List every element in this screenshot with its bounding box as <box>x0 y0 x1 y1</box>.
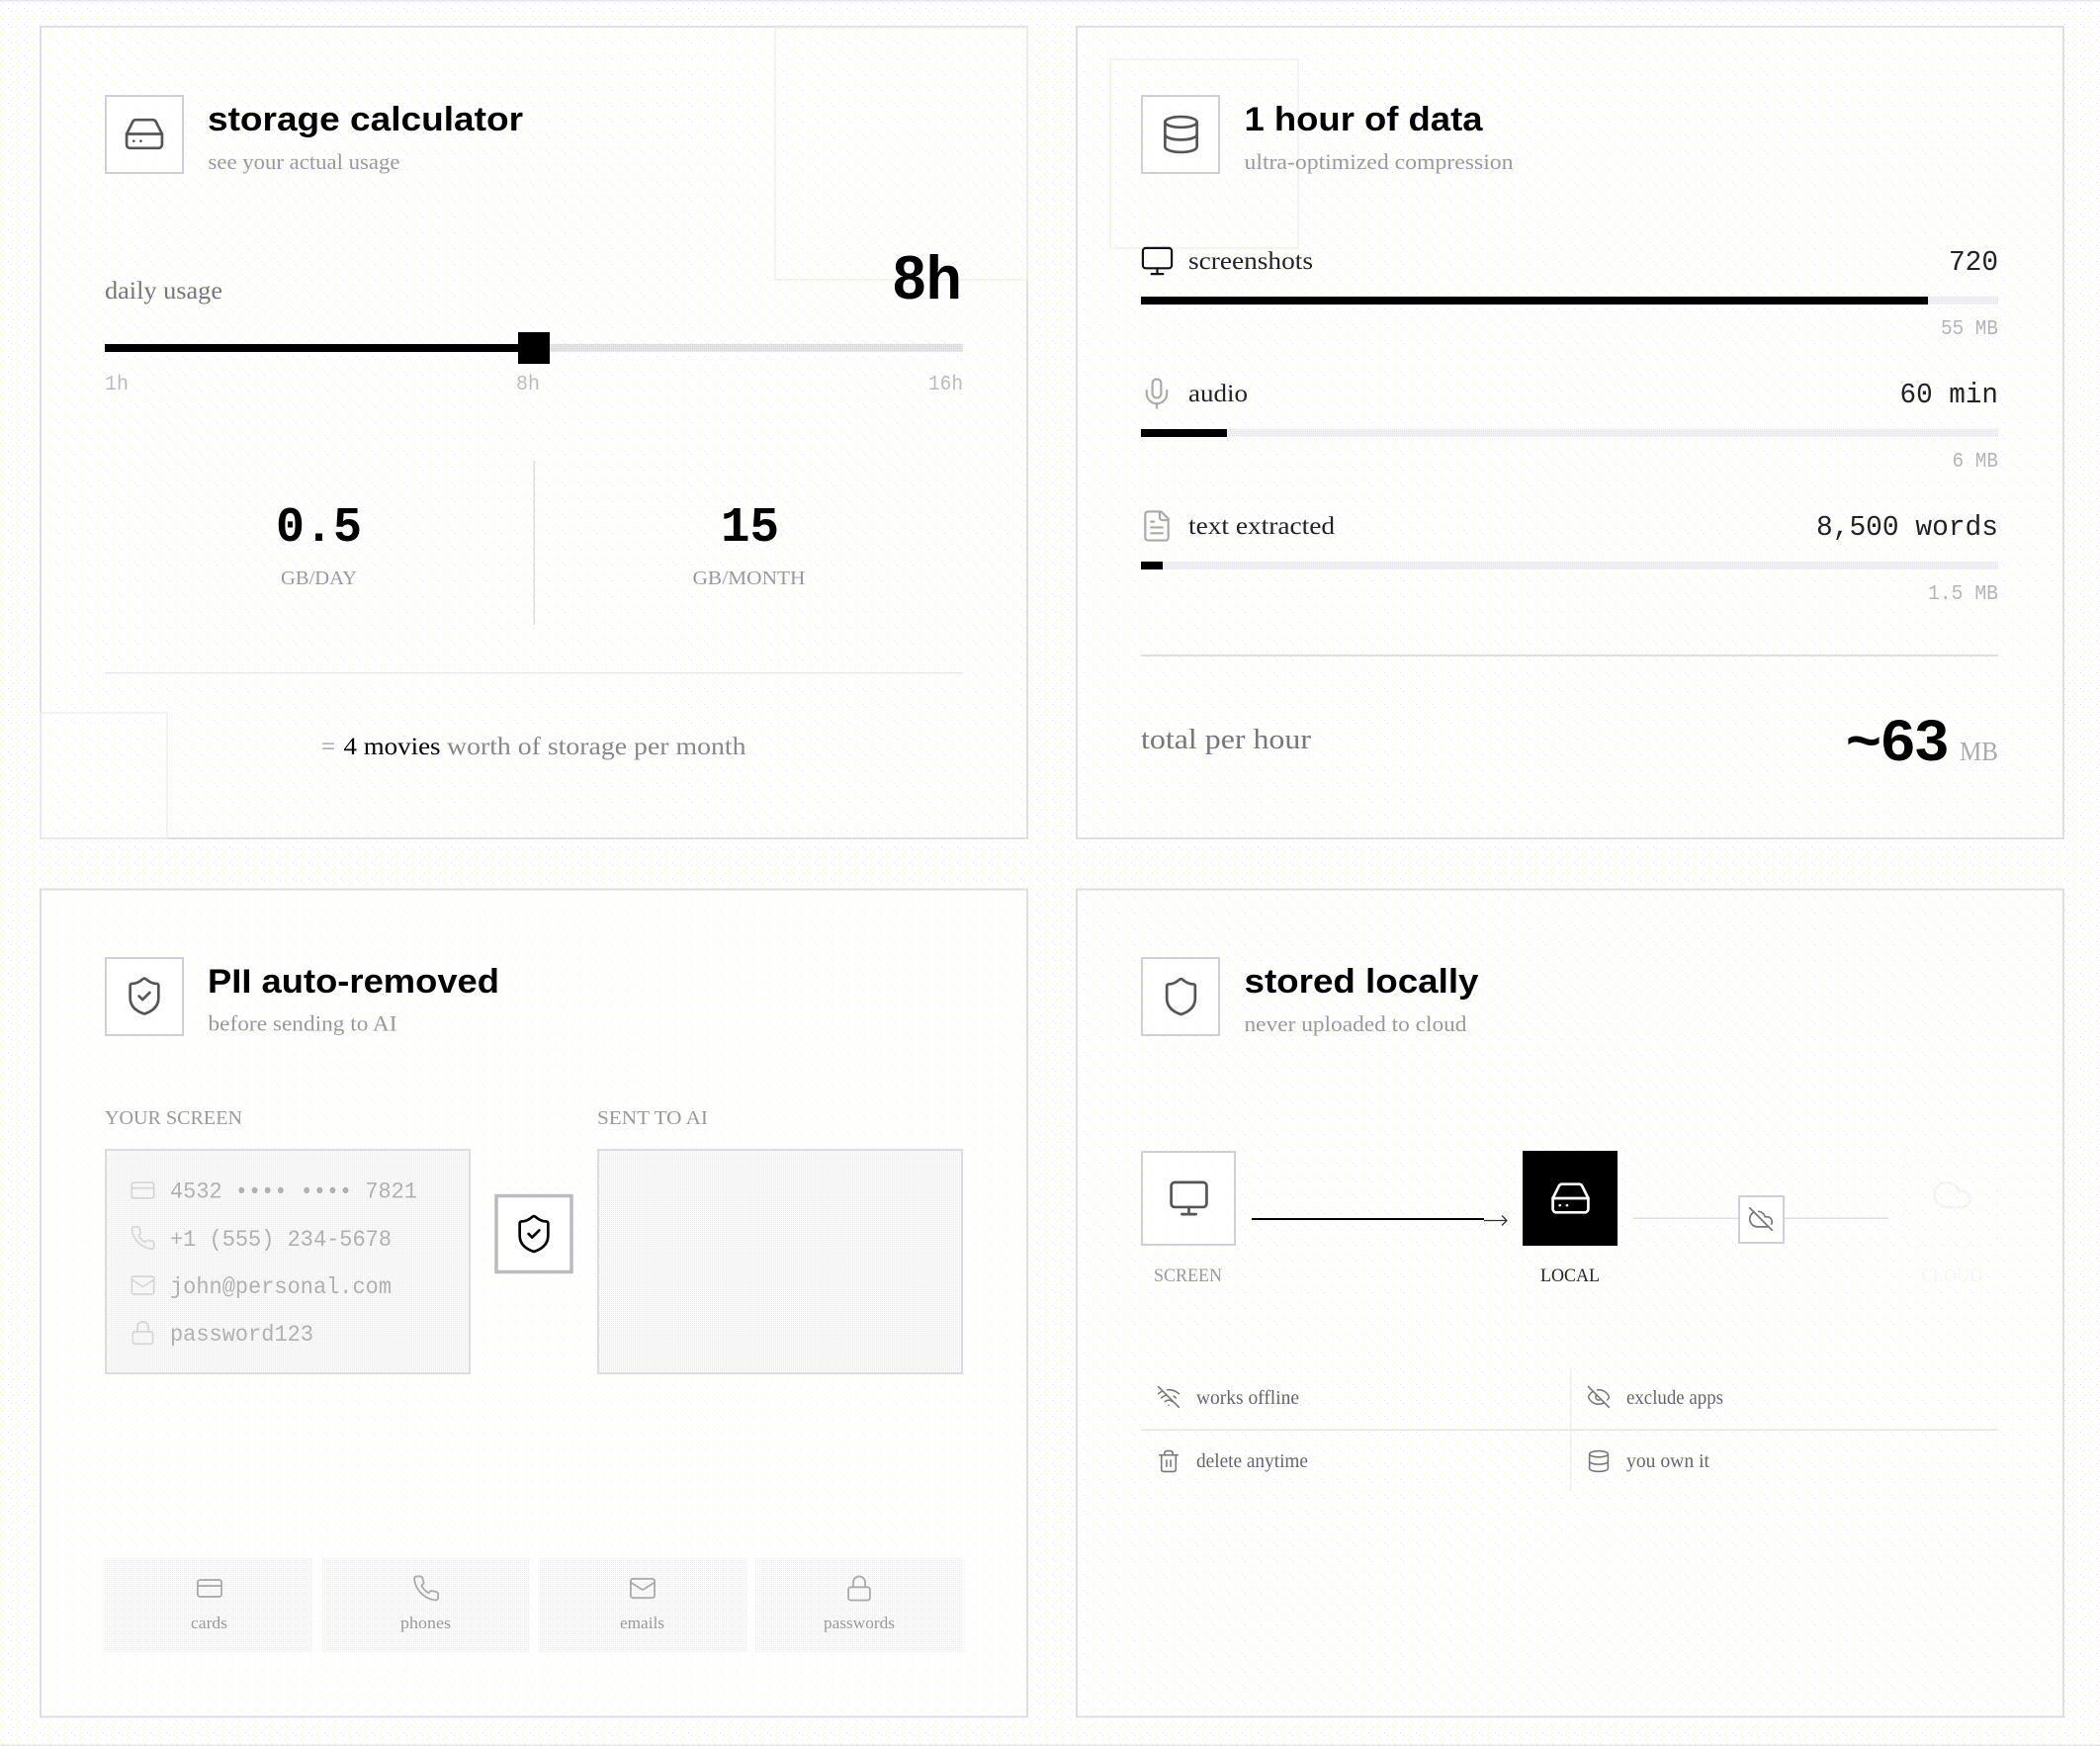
icon: database <box>1142 96 1219 173</box>
arrow: screen to local <box>1252 1216 1507 1226</box>
panel: stored locally <box>1077 890 2063 1716</box>
row: text extracted: 8,500 words <box>1816 511 1998 544</box>
subtitle: never uploaded to cloud <box>1244 1011 1467 1036</box>
node: screen <box>1142 1152 1235 1286</box>
panel: storage calculator <box>41 27 1027 838</box>
chip: phones: phones <box>400 1614 451 1632</box>
stat: GB per month: 15 <box>721 500 779 557</box>
caption: movies equivalent: = <box>321 734 335 760</box>
row: password: password123 <box>170 1322 313 1348</box>
node: screen: SCREEN <box>1154 1266 1222 1286</box>
label: sent to AI: SENT TO AI <box>597 1107 708 1129</box>
row: email: john@personal.com <box>170 1274 392 1300</box>
chip: cards <box>105 1558 312 1652</box>
caption: movies equivalent: 4 movies <box>344 734 441 760</box>
row: audio: audio <box>1188 381 1248 407</box>
box: your screen with PII <box>106 1150 470 1373</box>
stat: GB per month: GB/MONTH <box>692 567 805 589</box>
row: text extracted <box>1141 511 1998 606</box>
panel: PII auto-removed <box>41 890 1027 1716</box>
node: cloud (faded): CLOUD <box>1921 1266 1982 1286</box>
panel: 1 hour of data <box>1077 27 2063 838</box>
chip: phones <box>321 1558 529 1652</box>
node: cloud (faded) <box>1904 1152 1997 1286</box>
icon: shield <box>1142 958 1219 1035</box>
chip: cards: cards <box>191 1614 227 1632</box>
icon: shield check <box>106 958 183 1035</box>
row: screenshots: 720 <box>1949 246 1998 279</box>
row: audio <box>1141 379 1998 474</box>
row: screenshots: 55 MB <box>1941 318 1998 341</box>
box: sent to AI (empty) <box>598 1150 962 1373</box>
feature: delete anytime: delete anytime <box>1196 1450 1308 1472</box>
stat: GB per day: 0.5 <box>276 500 362 557</box>
value: 8h: 8h <box>893 244 962 312</box>
row: audio: 6 MB <box>1952 451 1998 474</box>
feature: you own it: you own it <box>1626 1450 1709 1472</box>
filter shield <box>496 1196 571 1271</box>
chip: passwords: passwords <box>824 1614 895 1632</box>
chip: passwords <box>755 1558 963 1652</box>
row: text extracted: text extracted <box>1188 513 1336 540</box>
total per hour: ~63 <box>1846 709 1949 773</box>
row: screenshots <box>1141 246 1998 341</box>
slider <box>105 332 963 396</box>
caption: movies equivalent: worth of storage per month <box>447 734 746 760</box>
feature: exclude apps: exclude apps <box>1626 1387 1723 1409</box>
subtitle: see your actual usage <box>208 149 399 174</box>
node: local: LOCAL <box>1540 1266 1600 1286</box>
caption: movies equivalent <box>321 734 746 760</box>
stat: GB per day <box>276 500 362 589</box>
total per hour: total per hour <box>1141 724 1311 755</box>
stat: GB per month <box>692 500 805 589</box>
row: text extracted: 1.5 MB <box>1928 583 1998 606</box>
subtitle: ultra-optimized compression <box>1244 149 1513 174</box>
row: audio: 60 min <box>1900 379 1998 411</box>
total per hour: MB <box>1960 737 1998 766</box>
stat: GB per day: GB/DAY <box>281 567 357 589</box>
slider: 16h <box>928 374 963 396</box>
row: phone: +1 (555) 234-5678 <box>170 1227 392 1253</box>
icon: hard drive <box>106 96 183 173</box>
blocked connection <box>1633 1196 1888 1243</box>
row: screenshots: screenshots <box>1188 248 1313 275</box>
heading: PII auto-removed: PII auto-removed <box>208 963 499 1001</box>
chip: emails <box>539 1558 746 1652</box>
heading: storage calculator: storage calculator <box>208 101 523 138</box>
label: your screen: YOUR SCREEN <box>105 1107 242 1129</box>
total per hour <box>1141 709 1998 773</box>
heading: 1 hour of data: 1 hour of data <box>1244 101 1484 138</box>
feature: you own it <box>1590 1450 1709 1472</box>
heading: stored locally: stored locally <box>1244 963 1479 1001</box>
slider: 8h <box>516 374 540 396</box>
label: daily usage: daily usage <box>105 278 222 305</box>
node: local <box>1523 1151 1618 1286</box>
row: card number: 4532 •••• •••• 7821 <box>170 1179 417 1204</box>
feature: exclude apps <box>1589 1387 1723 1409</box>
chip: emails: emails <box>620 1614 664 1632</box>
subtitle: before sending to AI <box>208 1010 397 1036</box>
feature: works offline: works offline <box>1196 1387 1299 1409</box>
slider: 1h <box>105 374 129 396</box>
